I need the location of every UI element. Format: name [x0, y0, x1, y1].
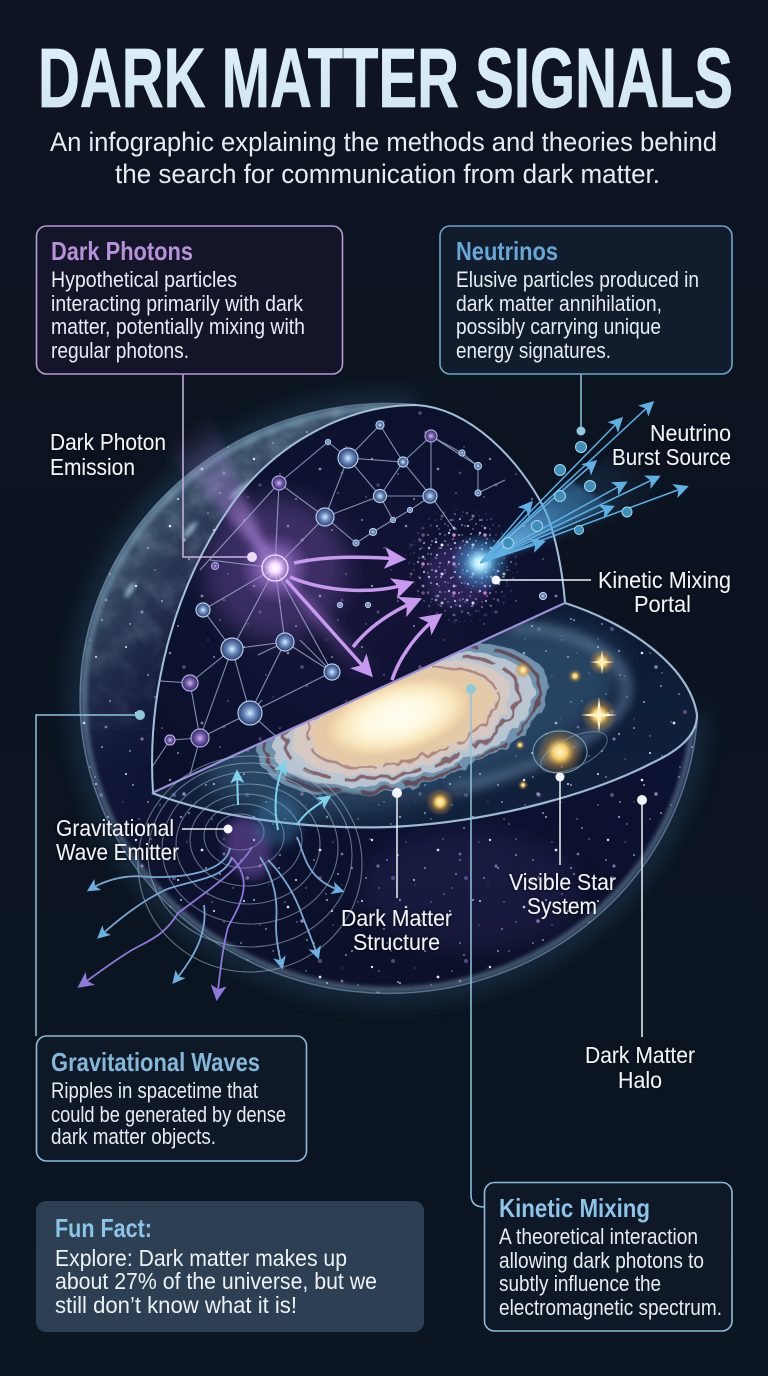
back wedge: network of nodes	[140, 400, 570, 800]
label: neutrino burst source: Burst Source	[612, 444, 731, 470]
panel: kinetic mixing	[484, 1182, 732, 1331]
connector: kinetic mixing	[466, 684, 484, 1207]
label: dark matter halo: Halo	[618, 1067, 662, 1093]
visible star system	[532, 729, 608, 774]
spiral galaxy	[198, 615, 629, 822]
panel: dark photons	[36, 226, 342, 374]
description: dark photons	[51, 267, 305, 363]
description: gravitational waves: dark matter objects.	[51, 1124, 216, 1149]
label: neutrino burst source: Neutrino	[650, 420, 731, 446]
description: kinetic mixing: A theoretical interaction	[499, 1224, 698, 1249]
label: visible star system: System	[527, 893, 597, 919]
connector: kinetic mixing portal	[492, 576, 591, 584]
label: dark matter halo: Dark Matter	[585, 1042, 695, 1068]
description: kinetic mixing: electromagnetic spectrum.	[499, 1295, 722, 1320]
subtitle: the search for communication from dark matter.	[115, 159, 660, 189]
panel: fun fact	[36, 1201, 424, 1332]
connector: gravitational waves	[36, 710, 145, 1036]
description: gravitational waves: Ripples in spacetime that	[51, 1078, 258, 1103]
label: dark matter structure: Dark Matter	[341, 905, 452, 931]
description: kinetic mixing: subtly influence the	[499, 1271, 661, 1296]
subtitle: An infographic explaining the methods and theories behind	[50, 127, 717, 157]
connector: dark matter halo	[637, 795, 647, 1037]
description: kinetic mixing: allowing dark photons to	[499, 1248, 704, 1273]
heading: gravitational waves: Gravitational Waves	[51, 1047, 260, 1077]
description: neutrinos: dark matter annihilation,	[456, 291, 662, 316]
bright stars	[426, 649, 617, 816]
description: fun fact: about 27% of the universe, but we	[55, 1268, 377, 1294]
description: gravitational waves	[51, 1078, 286, 1149]
panel: gravitational waves	[36, 1036, 306, 1161]
description: fun fact: Explore: Dark matter makes up	[55, 1245, 347, 1271]
neutrino burst: beam, rays and arrows	[450, 403, 686, 593]
diagram: cutaway dark matter sphere	[80, 400, 700, 1000]
label: dark matter halo	[585, 1042, 695, 1093]
description: fun fact	[55, 1245, 377, 1318]
connector: dark matter structure	[392, 788, 402, 898]
outer glow around the sphere	[80, 403, 697, 993]
galaxy disc	[152, 602, 698, 828]
nodes	[165, 421, 546, 747]
label: kinetic mixing portal: Kinetic Mixing	[598, 567, 731, 593]
label: neutrino burst source	[612, 420, 731, 470]
connector: gravitational wave emitter	[182, 824, 232, 834]
wedge outline	[152, 405, 565, 792]
kinetic mixing portal particle cluster	[405, 506, 518, 624]
description: neutrinos: energy signatures.	[456, 338, 611, 363]
label: visible star system: Visible Star	[509, 869, 616, 895]
label: kinetic mixing portal	[598, 567, 731, 617]
label: gravitational wave emitter: Gravitational	[56, 815, 174, 841]
dark photon emission beam outside the wedge	[150, 405, 275, 568]
description: gravitational waves: could be generated by dense	[51, 1102, 286, 1127]
description: dark photons: Hypothetical particles	[51, 267, 237, 292]
description: neutrinos: possibly carrying unique	[456, 314, 661, 339]
label: kinetic mixing portal: Portal	[634, 591, 691, 617]
heading: dark photons: Dark Photons	[51, 236, 193, 266]
label: dark photon emission	[50, 429, 166, 480]
label: visible star system	[509, 869, 616, 919]
heading: kinetic mixing: Kinetic Mixing	[499, 1193, 650, 1223]
panel: neutrinos	[440, 226, 732, 374]
dark photon source star	[239, 532, 311, 604]
description: dark photons: matter, potentially mixing with	[51, 314, 305, 339]
description: dark photons: interacting primarily with dark	[51, 291, 304, 316]
description: fun fact: still don’t know what it is!	[55, 1292, 297, 1318]
subtitle	[50, 127, 717, 189]
label: dark photon emission: Emission	[50, 454, 135, 480]
heading: fun fact: Fun Fact:	[55, 1213, 152, 1243]
gravitational wave emitter: ripples and outgoing arrows	[80, 756, 362, 998]
connector: visible star system	[556, 772, 564, 865]
description: neutrinos: Elusive particles produced in	[456, 267, 699, 292]
description: neutrinos	[456, 267, 699, 363]
purple signal arrows	[286, 557, 439, 680]
heading: neutrinos: Neutrinos	[456, 236, 558, 266]
label: gravitational wave emitter	[56, 815, 179, 865]
connector: neutrinos	[576, 374, 586, 436]
description: dark photons: regular photons.	[51, 338, 189, 363]
connector: dark photons	[183, 374, 257, 562]
label: dark photon emission: Dark Photon	[50, 429, 166, 455]
description: kinetic mixing	[499, 1224, 722, 1320]
sphere shell	[80, 400, 700, 1000]
label: dark matter structure: Structure	[353, 929, 440, 955]
label: dark matter structure	[341, 905, 452, 955]
label: gravitational wave emitter: Wave Emitter	[56, 839, 179, 865]
